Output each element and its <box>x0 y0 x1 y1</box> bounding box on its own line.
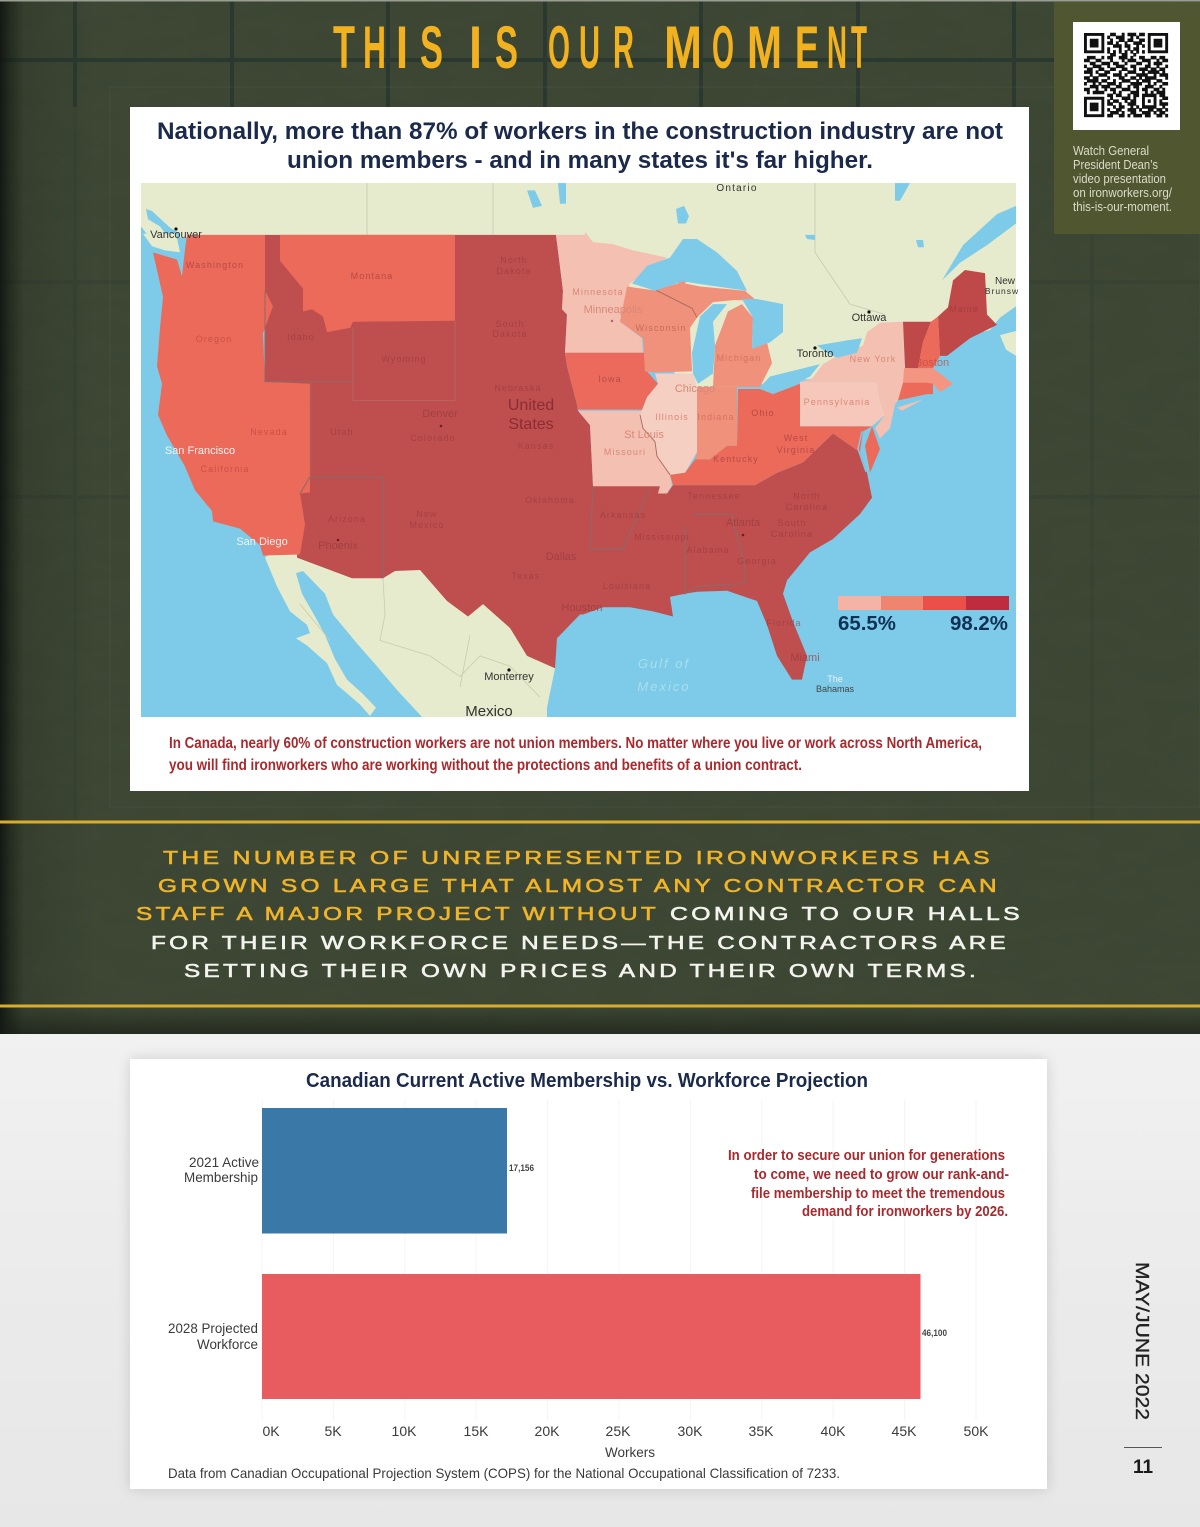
title: M <box>747 14 782 81</box>
map labels: Kansas <box>518 441 554 451</box>
background: dark green steel texture <box>0 0 1200 1034</box>
panel: US map card: Missouri <box>604 447 646 457</box>
x axis ticks: 5K <box>324 1423 342 1439</box>
category labels: Membership <box>184 1169 258 1185</box>
title: U <box>579 14 600 81</box>
panel: US map card <box>130 107 1029 791</box>
map labels: Carolina <box>786 502 828 512</box>
panel: US map card: Minneapolis <box>584 304 643 316</box>
panel: US map card: Phoenix <box>318 540 358 552</box>
panel: US map card: Ontario <box>716 183 758 194</box>
map labels: Virginia <box>777 445 815 455</box>
category labels: Workforce <box>197 1336 258 1352</box>
title: I <box>396 14 408 81</box>
title: T <box>333 14 355 81</box>
state: New Jersey <box>875 387 895 439</box>
state: Iowa <box>565 353 658 410</box>
land: Canada <box>141 170 1016 392</box>
map labels: Utah <box>330 427 354 437</box>
callout text: SETTING THEIR OWN PRICES AND THEIR OWN TERMS. <box>184 960 979 981</box>
land: Mexico <box>265 532 555 744</box>
map labels: Iowa <box>598 374 622 384</box>
panel: US map card: Mexico <box>637 679 691 694</box>
states: West coral group <box>153 235 310 556</box>
legend <box>838 596 1009 635</box>
map labels: Maine <box>949 304 979 314</box>
x axis ticks: 40K <box>821 1423 846 1439</box>
panel: US map card: States <box>508 416 554 433</box>
panel: US map card: Vancouver <box>150 229 202 241</box>
category labels: 2021 Active <box>189 1154 259 1170</box>
QR caption: this-is-our-moment. <box>1073 200 1172 214</box>
x axis ticks <box>262 1423 989 1460</box>
folio: issue date and page number <box>1124 1262 1162 1478</box>
panel: US map card: Mexico <box>465 703 513 720</box>
map labels: Texas <box>511 571 541 581</box>
title: O <box>548 14 570 81</box>
Canada note: In Canada, nearly 60% of construction workers are not union members. No matter where you live or work across North America, <box>169 735 982 752</box>
map labels: Carolina <box>771 529 813 539</box>
states: Ohio Kentucky West Virginia group <box>670 384 872 485</box>
map labels: Oregon <box>196 334 232 344</box>
callout text: STAFF A MAJOR PROJECT WITHOUT <box>136 903 659 924</box>
map labels: Washington <box>186 260 244 270</box>
map labels: California <box>200 464 250 474</box>
title: S <box>420 14 443 81</box>
map labels: Mississippi <box>634 532 690 542</box>
panel: US map card: San Francisco <box>165 445 235 457</box>
QR caption: on ironworkers.org/ <box>1073 186 1172 200</box>
title: E <box>795 14 819 81</box>
panel: US map card: San Diego <box>236 536 288 548</box>
x axis ticks: 30K <box>678 1423 703 1439</box>
QR caption: President Dean’s <box>1073 158 1158 172</box>
bar: 2021 active membership: 17,156 <box>509 1163 534 1173</box>
Canadian provincial lines <box>367 180 885 314</box>
text: T <box>851 14 867 81</box>
map labels: Arkansas <box>600 510 646 520</box>
map labels: West <box>784 433 808 443</box>
category labels <box>168 1154 259 1352</box>
panel: US map card: United <box>508 397 554 414</box>
panel: US map card: Michigan <box>717 353 761 363</box>
title: I <box>469 14 482 81</box>
inland lakes and St Lawrence <box>527 183 1016 280</box>
title: S <box>495 14 518 81</box>
panel: US map card: Denver <box>422 408 458 420</box>
states: dark group <box>265 235 872 680</box>
state: Wisconsin <box>620 287 697 372</box>
red callout: demand for ironworkers by 2026. <box>802 1203 1008 1220</box>
map labels: Colorado <box>410 433 456 443</box>
gridlines <box>262 1100 976 1420</box>
x axis ticks: 0K <box>262 1423 280 1439</box>
map heading <box>157 118 1003 174</box>
title: M <box>664 14 702 81</box>
map labels: New <box>416 509 438 519</box>
legend: 98.2% <box>950 613 1008 635</box>
panel: US map card: Toronto <box>797 348 833 360</box>
red callout: In order to secure our union for generations <box>728 1147 1005 1164</box>
state: New Hampshire <box>918 317 940 368</box>
panel: US map card: Monterrey <box>484 671 534 683</box>
QR code <box>1073 22 1180 130</box>
chart title: Canadian Current Active Membership vs. Workforce Projection <box>306 1070 868 1092</box>
category labels: 2028 Projected <box>168 1320 258 1336</box>
map labels: Nebraska <box>494 383 542 393</box>
bar: 2021 active membership <box>262 1108 534 1234</box>
map labels: South <box>495 319 525 329</box>
map labels: Arizona <box>328 514 366 524</box>
Canada note: you will find ironworkers who are working without the protections and benefits of a union contract. <box>169 757 802 774</box>
state: New York <box>800 322 905 404</box>
state: Maine <box>938 270 997 356</box>
map labels: North <box>500 255 528 265</box>
panel: US map card: The <box>827 674 843 684</box>
state: Illinois <box>640 373 697 475</box>
panel: US map card: Wisconsin <box>636 323 686 333</box>
callout text <box>136 847 1023 981</box>
map labels: Louisiana <box>603 581 651 591</box>
folio: issue date and page number: 11 <box>1133 1457 1153 1478</box>
map labels <box>186 255 979 628</box>
Canada note <box>169 735 982 774</box>
panel: US map card: Illinois <box>655 412 689 422</box>
panel: US map card: Miami <box>790 652 820 664</box>
title <box>333 14 867 81</box>
map labels: Nevada <box>250 427 288 437</box>
map heading: union members - and in many states it's far higher. <box>287 147 873 174</box>
panel: US map card: Chicago <box>675 383 715 395</box>
callout text: THE NUMBER OF UNREPRESENTED IRONWORKERS HAS <box>163 847 993 868</box>
axis title: Workers <box>605 1445 655 1460</box>
x axis ticks: 10K <box>392 1423 417 1439</box>
map labels: Florida <box>766 618 802 628</box>
state: Indiana <box>695 387 737 459</box>
folio: issue date and page number: MAY/JUNE 2022 <box>1132 1262 1152 1420</box>
map labels: Tennessee <box>687 491 741 501</box>
panel: Canadian bar chart <box>130 1059 1047 1489</box>
panel: US map card: New York <box>850 354 896 364</box>
panel: US map card: Pennsylvania <box>804 397 870 407</box>
title: H <box>363 14 386 81</box>
map labels: South <box>777 518 807 528</box>
map labels: Mexico <box>409 520 445 530</box>
map heading: Nationally, more than 87% of workers in the construction industry are not <box>157 118 1003 145</box>
callout text: COMING TO OUR HALLS <box>670 903 1023 924</box>
map labels: North <box>793 491 821 501</box>
map labels: Ohio <box>751 408 775 418</box>
Washington coast water <box>146 209 180 238</box>
title: O <box>712 14 734 81</box>
panel: US map card: Brunsw <box>985 286 1019 296</box>
state: Missouri <box>578 411 672 493</box>
map labels: Idaho <box>287 332 315 342</box>
state outlines in the dark group <box>265 291 745 594</box>
map labels: Dakota <box>496 266 532 276</box>
red callout: file membership to meet the tremendous <box>751 1185 1005 1202</box>
band: callout statement <box>0 820 1200 1008</box>
panel: US map card: Indiana <box>697 412 735 422</box>
x axis ticks: 15K <box>464 1423 489 1439</box>
state: Michigan <box>657 281 772 387</box>
bar: 2028 projected workforce <box>262 1274 947 1399</box>
map labels: Montana <box>351 271 393 281</box>
x axis ticks: 20K <box>535 1423 560 1439</box>
QR caption: video presentation <box>1073 172 1166 186</box>
title: R <box>613 14 634 81</box>
panel: US map card: St Louis <box>624 429 664 441</box>
state: Massachusetts <box>903 368 953 392</box>
map labels: Oklahoma <box>525 495 575 505</box>
panel: US map card: Houston <box>562 602 602 614</box>
title: N <box>827 14 847 81</box>
panel: US map card: New <box>995 276 1016 287</box>
choropleth map <box>141 170 1016 744</box>
callout text: FOR THEIR WORKFORCE NEEDS—THE CONTRACTORS ARE <box>151 932 1009 953</box>
background: light paper lower section <box>0 1034 1200 1527</box>
state: Minnesota <box>556 232 667 353</box>
panel: US map card: Ottawa <box>852 312 887 324</box>
map labels: Kentucky <box>713 454 759 464</box>
callout text: GROWN SO LARGE THAT ALMOST ANY CONTRACTOR CAN <box>158 875 1000 896</box>
state: Pennsylvania <box>800 382 885 426</box>
panel: US map card: Dallas <box>546 551 577 563</box>
panel: US map card: Gulf of <box>638 656 690 671</box>
panel: US map card: Boston <box>915 357 949 369</box>
QR sidebar panel <box>1054 2 1200 234</box>
Great Lakes <box>632 239 747 291</box>
x axis ticks: 35K <box>749 1423 774 1439</box>
data source: Data from Canadian Occupational Projection System (COPS) for the National Occupational Classification of 7233. <box>168 1465 840 1481</box>
map labels: Wyoming <box>381 354 427 364</box>
bar: 2028 projected workforce: 46,100 <box>922 1328 947 1338</box>
x axis ticks: 45K <box>892 1423 917 1439</box>
panel: US map card: Bahamas <box>816 684 855 694</box>
map labels: Alabama <box>686 545 730 555</box>
red callout <box>728 1147 1009 1220</box>
legend: 65.5% <box>838 613 896 635</box>
state: Vermont <box>903 322 931 368</box>
QR caption: Watch General <box>1073 144 1149 158</box>
panel: US map card: Atlanta <box>726 517 761 529</box>
red callout: to come, we need to grow our rank-and- <box>754 1166 1009 1183</box>
panel: US map card: Minnesota <box>572 287 624 297</box>
x axis ticks: 50K <box>964 1423 989 1439</box>
state: Connecticut and Rhode Island <box>898 383 933 400</box>
x axis ticks: 25K <box>606 1423 631 1439</box>
QR caption <box>1073 144 1172 214</box>
map labels: Dakota <box>492 329 528 339</box>
map labels: Georgia <box>737 556 777 566</box>
